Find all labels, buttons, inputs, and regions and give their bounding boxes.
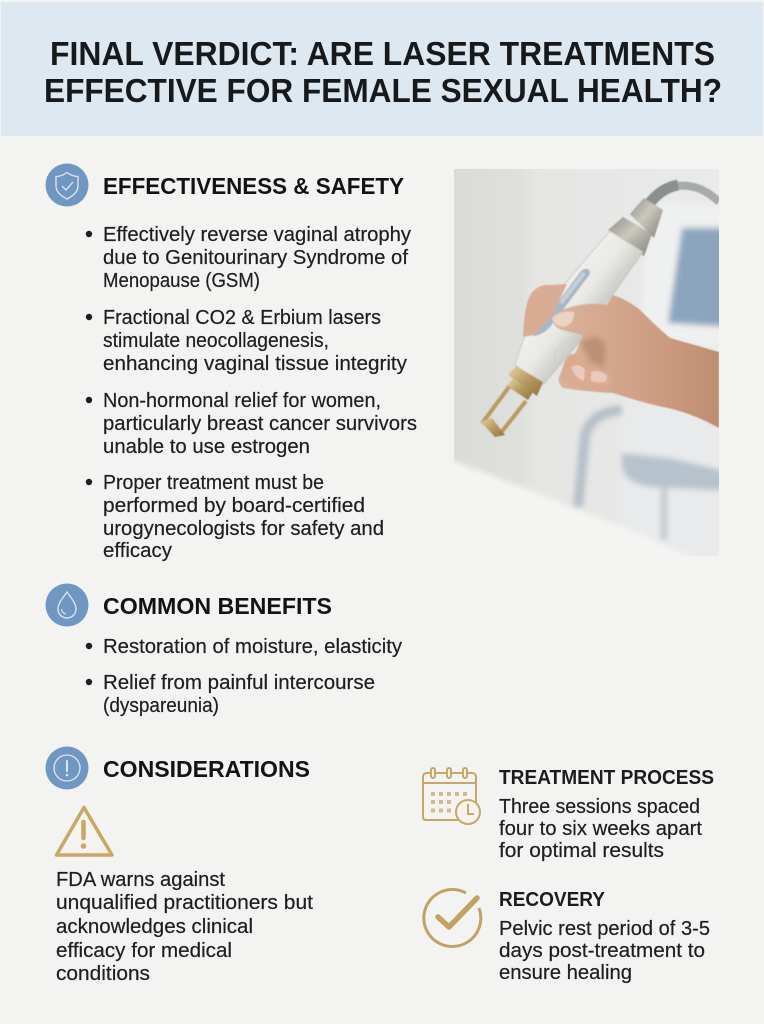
- photo: laser handpiece held in a hand: [445, 169, 730, 565]
- bullet: dyspareunia: Relief from painful intercourse: [103, 672, 375, 694]
- title: EFFECTIVE FOR FEMALE SEXUAL HEALTH?: [44, 72, 722, 109]
- bullet: dyspareunia: (dyspareunia): [103, 695, 219, 717]
- bullet: non-hormonal relief: unable to use estrogen: [103, 436, 310, 458]
- text: FDA warning: conditions: [56, 963, 150, 985]
- icon: check circle: [424, 889, 481, 946]
- icon: exclamation circle: [46, 746, 88, 790]
- bullet: vaginal atrophy: Effectively reverse vaginal atrophy: [103, 224, 411, 246]
- text: sessions: Three sessions spaced: [499, 796, 700, 818]
- bullet: vaginal atrophy: due to Genitourinary Syndrome of: [103, 247, 408, 269]
- bullet: non-hormonal relief: particularly breast cancer survivors: [103, 413, 417, 435]
- panel: considerations: [46, 746, 313, 985]
- text: pelvic rest: ensure healing: [499, 962, 632, 984]
- icon: shield with check: [46, 164, 88, 206]
- text: sessions: four to six weeks apart: [499, 818, 702, 840]
- heading: recovery: RECOVERY: [499, 889, 606, 911]
- panel: effectiveness and safety: [46, 164, 417, 562]
- cable: [676, 186, 719, 202]
- bullet: proper treatment: Proper treatment must be: [103, 472, 324, 494]
- text: pelvic rest: days post-treatment to: [499, 940, 705, 962]
- title: [44, 35, 722, 109]
- bullet: fractional lasers: stimulate neocollagenesis,: [103, 330, 329, 352]
- handle body: [515, 231, 643, 385]
- bullet: proper treatment: performed by board-certified: [103, 495, 365, 517]
- heading: considerations: CONSIDERATIONS: [103, 756, 310, 782]
- text: FDA warning: [56, 869, 313, 985]
- heading: effectiveness and safety: EFFECTIVENESS & SAFETY: [103, 173, 404, 199]
- text: FDA warning: efficacy for medical: [56, 940, 232, 962]
- panel: treatment process: [423, 767, 714, 862]
- bullet: fractional lasers: [86, 307, 407, 375]
- bullet: fractional lasers: Fractional CO2 & Erbium lasers: [103, 307, 381, 329]
- text: FDA warning: unqualified practitioners but: [56, 892, 313, 914]
- heading: common benefits: COMMON BENEFITS: [103, 593, 332, 619]
- finger nails: [571, 365, 585, 381]
- text: FDA warning: FDA warns against: [56, 869, 225, 891]
- bullet: dyspareunia: [86, 672, 375, 717]
- curled fingers: [561, 353, 574, 373]
- bullet: non-hormonal relief: Non-hormonal relief for women,: [103, 390, 381, 412]
- bullet: vaginal atrophy: [86, 224, 411, 292]
- bullet: moisture: Restoration of moisture, elasticity: [103, 636, 402, 658]
- bullet: proper treatment: efficacy: [103, 540, 172, 562]
- icon: water drop: [46, 584, 88, 626]
- text: FDA warning: acknowledges clinical: [56, 916, 253, 938]
- thumb nail: [552, 312, 574, 327]
- text: pelvic rest: [499, 918, 710, 984]
- text: sessions: for optimal results: [499, 840, 664, 862]
- text: pelvic rest: Pelvic rest period of 3-5: [499, 918, 710, 940]
- hand and wrist: [552, 295, 719, 428]
- text: sessions: [499, 796, 702, 862]
- title: FINAL VERDICT: ARE LASER TREATMENTS: [50, 35, 715, 72]
- gold collar: [508, 366, 543, 396]
- panel: common benefits: [46, 584, 402, 717]
- icon: warning triangle: [56, 808, 112, 855]
- index finger: [523, 284, 567, 337]
- bullet: fractional lasers: enhancing vaginal tissue integrity: [103, 353, 407, 375]
- bullet: non-hormonal relief: [86, 390, 417, 458]
- icon: calendar with clock: [423, 768, 480, 824]
- panel: recovery: [424, 889, 710, 984]
- bullet: vaginal atrophy: Menopause (GSM): [103, 270, 260, 292]
- shadow between fingers: [580, 336, 606, 368]
- bullet: proper treatment: urogynecologists for safety and: [103, 518, 384, 540]
- heading: treatment process: TREATMENT PROCESS: [499, 767, 714, 789]
- bullet: proper treatment: [86, 472, 384, 562]
- title banner: [1, 2, 763, 136]
